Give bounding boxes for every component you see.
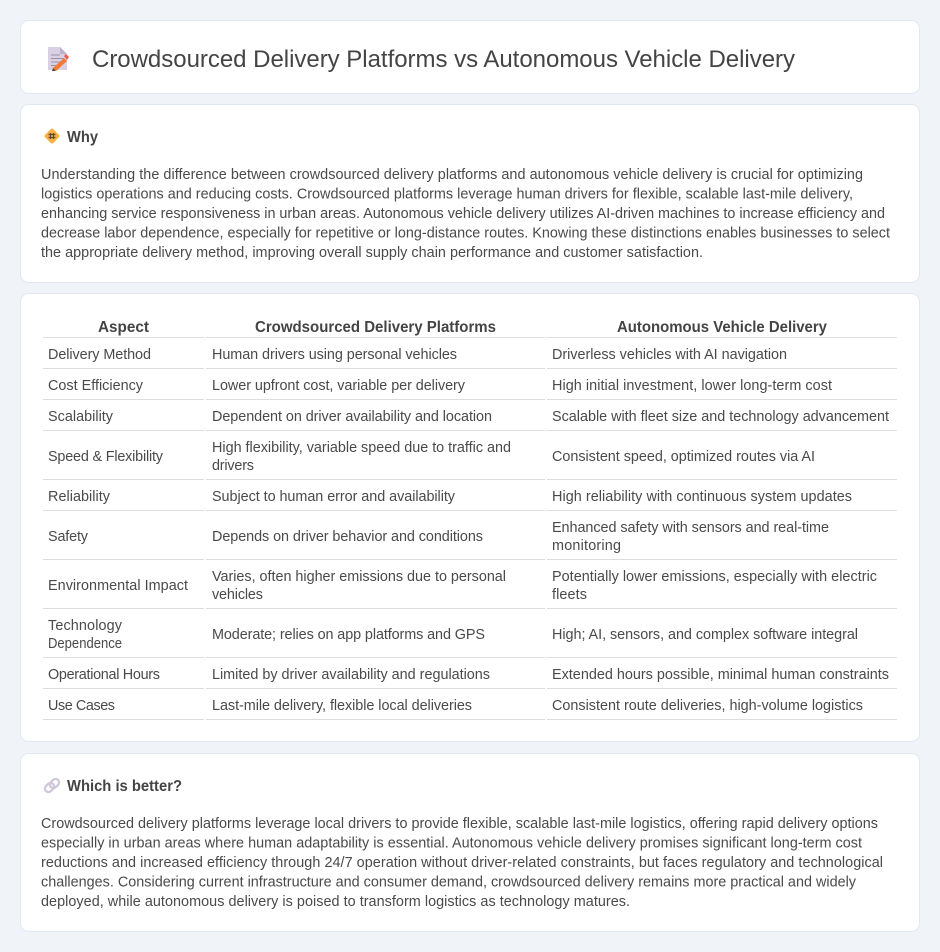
icon: document with pencil [48,47,69,71]
row: speed and flexibility: Speed & Flexibility [48,449,164,465]
row: safety: monitoring [552,538,621,554]
row: delivery method [43,347,897,369]
row: scalability: Scalable with fleet size and technology advancement [552,409,889,425]
text block: which is better: Crowdsourced delivery platforms leverage local drivers to provide flexible, scalable last-mile logistics, offering rapid delivery options [41,816,878,832]
row: delivery method: Delivery Method [48,347,151,363]
panel: comparison table [20,294,920,742]
row: reliability: Subject to human error and availability [212,489,456,505]
table header row: Aspect [98,319,149,336]
table header row [43,319,897,338]
row: safety: Enhanced safety with sensors and real-time [552,520,829,536]
text block: why: Understanding the difference between crowdsourced delivery platforms and autonomous vehicle delivery is crucial for optimizing [41,167,863,183]
row: safety: Depends on driver behavior and conditions [212,529,483,545]
row: environmental impact: Potentially lower emissions, especially with electric [552,569,877,585]
row: operational hours: Extended hours possible, minimal human constraints [552,667,889,683]
row: environmental impact: Environmental Impact [48,578,188,594]
row: reliability: Reliability [48,489,111,505]
header panel [20,20,920,94]
row: delivery method: Driverless vehicles with AI navigation [552,347,787,363]
text block: why [41,167,890,261]
row: speed and flexibility [43,440,897,480]
row: use cases: Last-mile delivery, flexible local deliveries [212,698,472,714]
row: environmental impact [43,569,897,609]
row: cost efficiency: Cost Efficiency [48,378,144,394]
row: technology dependence: Technology [48,618,123,634]
heading: why: Why [67,129,98,146]
row: scalability [43,409,897,431]
row: safety: Safety [48,529,89,545]
row: speed and flexibility: drivers [212,458,254,474]
text block: which is better [41,816,883,910]
row: use cases [43,698,897,720]
text block: why: the appropriate delivery method, improving overall supply chain performance and customer satisfaction. [41,245,703,261]
row: operational hours: Limited by driver availability and regulations [212,667,490,683]
row: technology dependence: High; AI, sensors, and complex software integral [552,627,858,643]
row: operational hours: Operational Hours [48,667,160,683]
row: environmental impact: vehicles [212,587,263,603]
row: speed and flexibility: Consistent speed, optimized routes via AI [552,449,815,465]
panel: which is better [20,754,920,932]
text block: which is better: challenges. Considering current infrastructure and consumer demand, crowdsourced delivery remains more practical and widely [41,874,857,890]
text block: which is better: reductions and increased efficiency through 24/7 operation without driver-related constraints, but faces regulatory and technological [41,855,883,871]
row: safety [43,520,897,560]
title: Crowdsourced Delivery Platforms vs Autonomous Vehicle Delivery [92,46,795,73]
icon: diamond sign [44,128,60,144]
panel: why [20,104,920,282]
row: reliability: High reliability with continuous system updates [552,489,852,505]
row: use cases: Consistent route deliveries, high-volume logistics [552,698,863,714]
heading: which is better: Which is better? [67,778,182,795]
text block: which is better: especially in urban areas where human adaptability is essential. Autonomous vehicle delivery promises significant long-term cost [41,836,862,852]
row: environmental impact: fleets [552,587,587,603]
row: cost efficiency [43,378,897,400]
text block: why: decrease labor dependence, especially for repetitive or long-distance routes. Knowing these distinctions enables businesses to select [41,226,890,242]
row: speed and flexibility: High flexibility, variable speed due to traffic and [212,440,511,456]
table header row: Crowdsourced Delivery Platforms [255,319,496,336]
row: technology dependence [43,618,897,658]
table header row: Autonomous Vehicle Delivery [617,319,827,336]
row: cost efficiency: High initial investment, lower long-term cost [552,378,832,394]
text block: why: enhancing service responsiveness in urban areas. Autonomous vehicle delivery utilizes AI-driven machines to increase efficiency and [41,206,885,222]
row: technology dependence: Moderate; relies on app platforms and GPS [212,627,485,643]
row: use cases: Use Cases [48,698,115,714]
text block: why: logistics operations and reducing costs. Crowdsourced platforms leverage human drivers for flexible, scalable last-mile delivery, [41,186,853,202]
row: scalability: Scalability [48,409,114,425]
row: operational hours [43,667,897,689]
row: delivery method: Human drivers using personal vehicles [212,347,457,363]
row: scalability: Dependent on driver availability and location [212,409,492,425]
text block: which is better: deployed, while autonomous delivery is poised to transform logistics as technology matures. [41,894,630,910]
row: environmental impact: Varies, often higher emissions due to personal [212,569,506,585]
row: cost efficiency: Lower upfront cost, variable per delivery [212,378,466,394]
icon: chain link [43,777,61,794]
row: technology dependence: Dependence [48,636,122,652]
row: reliability [43,489,897,511]
